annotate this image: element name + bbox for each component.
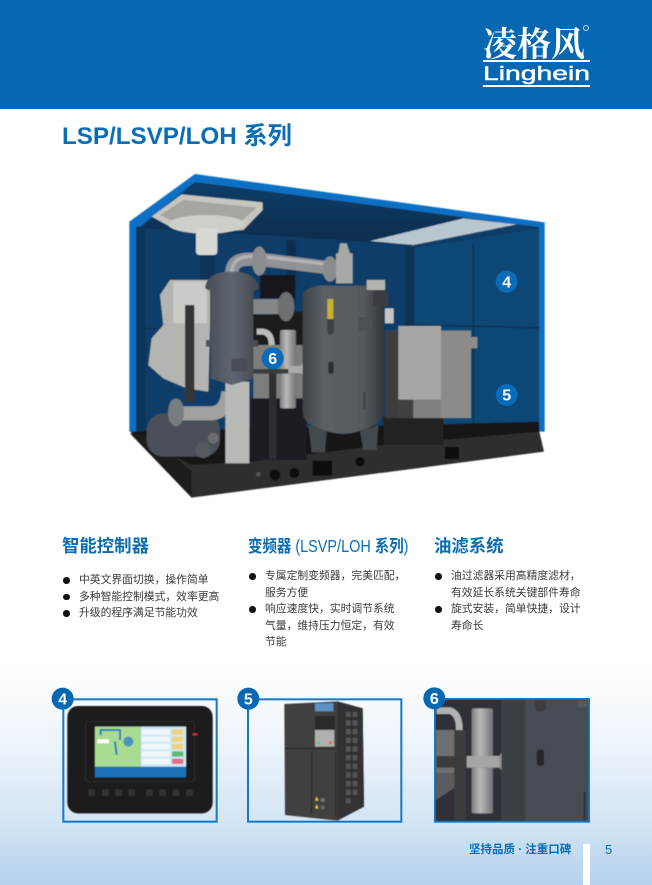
valve nozzle [336, 243, 353, 283]
heading: controller: 智能控制器 [62, 536, 149, 556]
callout 5: 5 [502, 388, 511, 405]
lower cooler and pipe [147, 392, 228, 458]
enclosure back and side walls [130, 182, 539, 432]
icon: inverter unit [284, 701, 364, 821]
badge 6 [423, 687, 445, 709]
list: oil filter features: 旋式安装，简单快捷，设计 [451, 603, 581, 615]
bracket [288, 358, 307, 375]
icon: control panel device [67, 706, 213, 813]
floor [130, 422, 539, 485]
list: controller features: 升级的程序满足节能功效 [79, 607, 198, 619]
badge 4 [52, 688, 74, 710]
list: controller features: 多种智能控制模式，效率更高 [79, 590, 219, 602]
roof and side frame [129, 174, 545, 432]
heading: inverter: 变频器 (LSVP/LOH 系列) [248, 536, 408, 556]
middle pipes [253, 292, 303, 398]
badge 5: 5 [244, 691, 253, 708]
thumbnail panel 4: controller [52, 688, 218, 823]
thumbnail panel 6: oil filter closeup [423, 687, 590, 823]
image: filter closeup [436, 700, 588, 821]
title: LSP/LSVP/LOH 系列 [62, 123, 292, 150]
list: inverter features [249, 570, 405, 648]
list: inverter features: 服务方便 [265, 586, 308, 598]
air oil tank [303, 280, 394, 452]
ventilation fan unit [152, 194, 263, 255]
list: controller features: 中英文界面切换，操作简单 [79, 574, 209, 586]
base frame [130, 432, 544, 498]
footer white bar [583, 844, 590, 885]
perforated ceiling panel [370, 218, 517, 245]
badge 6: 6 [430, 691, 439, 708]
control cabinet [385, 326, 477, 418]
dark machine interior [250, 275, 443, 460]
separator vessel [205, 272, 259, 385]
list: inverter features: 专属定制变频器，完美匹配， [265, 570, 405, 582]
thumbnail panel 5: inverter [237, 688, 402, 823]
page number: 5 [605, 842, 612, 857]
callout 4: 4 [502, 274, 511, 291]
badge 4: 4 [58, 691, 67, 708]
logo: Linghein [483, 17, 590, 87]
badge 5 [237, 688, 259, 710]
callout 6 [262, 347, 284, 369]
list: inverter features: 响应速度快，实时调节系统 [265, 603, 395, 615]
machine illustration [128, 173, 546, 498]
compressor body [148, 280, 210, 402]
logo: Linghein: 凌格风 [483, 17, 585, 66]
callout 4 [496, 271, 518, 293]
callout 5 [496, 384, 518, 406]
list: inverter features: 节能 [265, 636, 287, 648]
concrete support [225, 382, 249, 463]
list: oil filter features [435, 570, 581, 632]
upper discharge pipe [232, 246, 337, 282]
hose [269, 367, 276, 459]
callout 6: 6 [268, 351, 277, 368]
heading: oil filter: 油滤系统 [434, 536, 504, 556]
logo: Linghein: Linghein [483, 63, 590, 85]
list: oil filter features: 有效延长系统关键部件寿命 [451, 586, 581, 598]
footer slogan: 坚持品质 · 注重口碑 [469, 844, 571, 856]
list: inverter features: 气量，维持压力恒定，有效 [265, 620, 395, 632]
list: oil filter features: 寿命长 [451, 620, 483, 632]
list: controller features [63, 574, 219, 619]
header band with logo [0, 0, 652, 109]
oil filter cylinder [280, 330, 296, 408]
list: oil filter features: 油过滤器采用高精度滤材， [451, 570, 581, 582]
